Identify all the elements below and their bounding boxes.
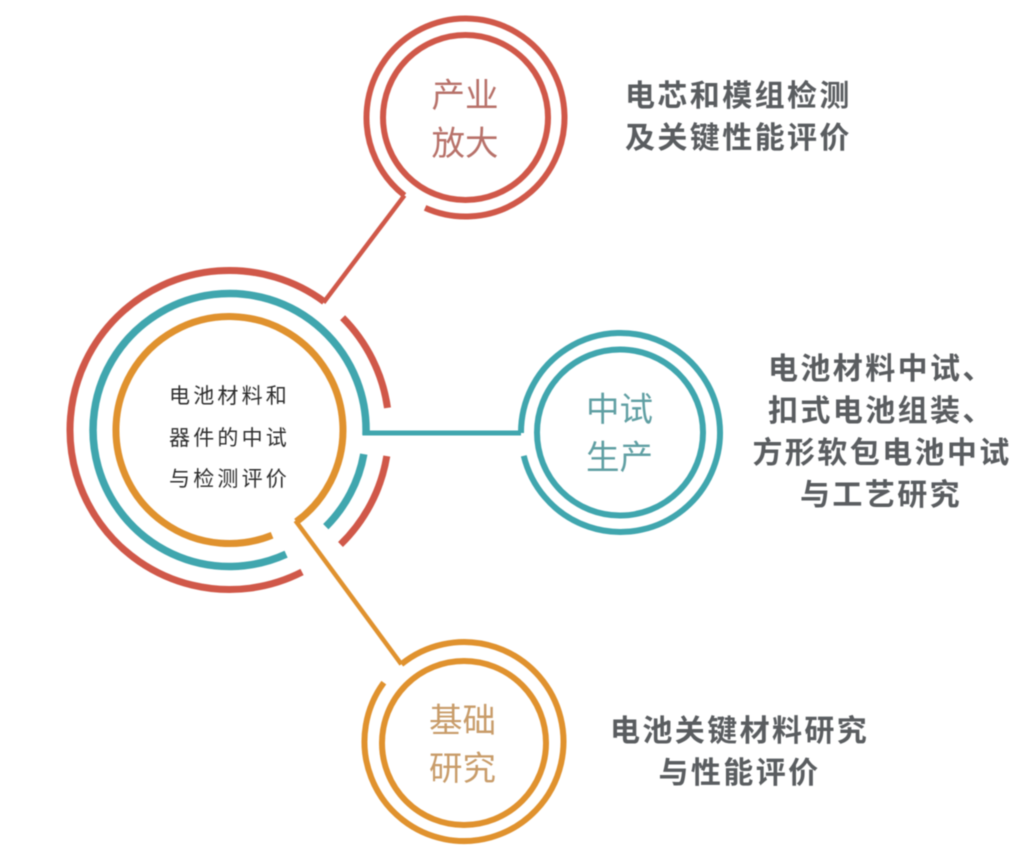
node label: 中试: [586, 392, 653, 429]
description: 中试生产: 与工艺研究: [800, 479, 962, 512]
central hub label: 器件的中试: [169, 427, 290, 450]
central hub: concentric rings: [70, 195, 521, 664]
teal arc lower right: [326, 454, 364, 527]
red arc upper right: [343, 318, 388, 408]
teal middle ring: [93, 293, 366, 566]
node rings: [521, 333, 720, 532]
central hub label: 与检测评价: [169, 468, 290, 491]
description: 基础研究: 电池关键材料研究: [610, 715, 869, 748]
node label: 放大: [432, 126, 498, 163]
description: 产业放大: 电芯和模组检测: [625, 80, 852, 113]
central hub label: 电池材料和: [169, 385, 290, 408]
node rings: [364, 642, 563, 841]
connector to bottom node: [296, 521, 401, 664]
orange inner ring: [116, 317, 343, 544]
node label: 基础: [429, 703, 496, 740]
description: 中试生产: 扣式电池组装、: [768, 395, 995, 428]
connector to middle node: [362, 430, 521, 436]
node rings: [367, 19, 565, 217]
description: 基础研究: 与性能评价: [658, 757, 820, 790]
red arc lower right: [340, 456, 387, 544]
red outer ring: [70, 270, 324, 589]
node label: 产业: [432, 78, 498, 115]
description: 中试生产: 方形软包电池中试: [752, 437, 1012, 470]
connector to top node: [324, 195, 404, 303]
description: 产业放大: 及关键性能评价: [625, 122, 852, 155]
node: 基础研究: [364, 642, 563, 841]
node: 中试生产: [521, 333, 720, 532]
description: 中试生产: 电池材料中试、: [768, 353, 995, 386]
node label: 研究: [429, 751, 496, 788]
node label: 生产: [586, 440, 653, 477]
node: 产业放大: [367, 19, 565, 217]
